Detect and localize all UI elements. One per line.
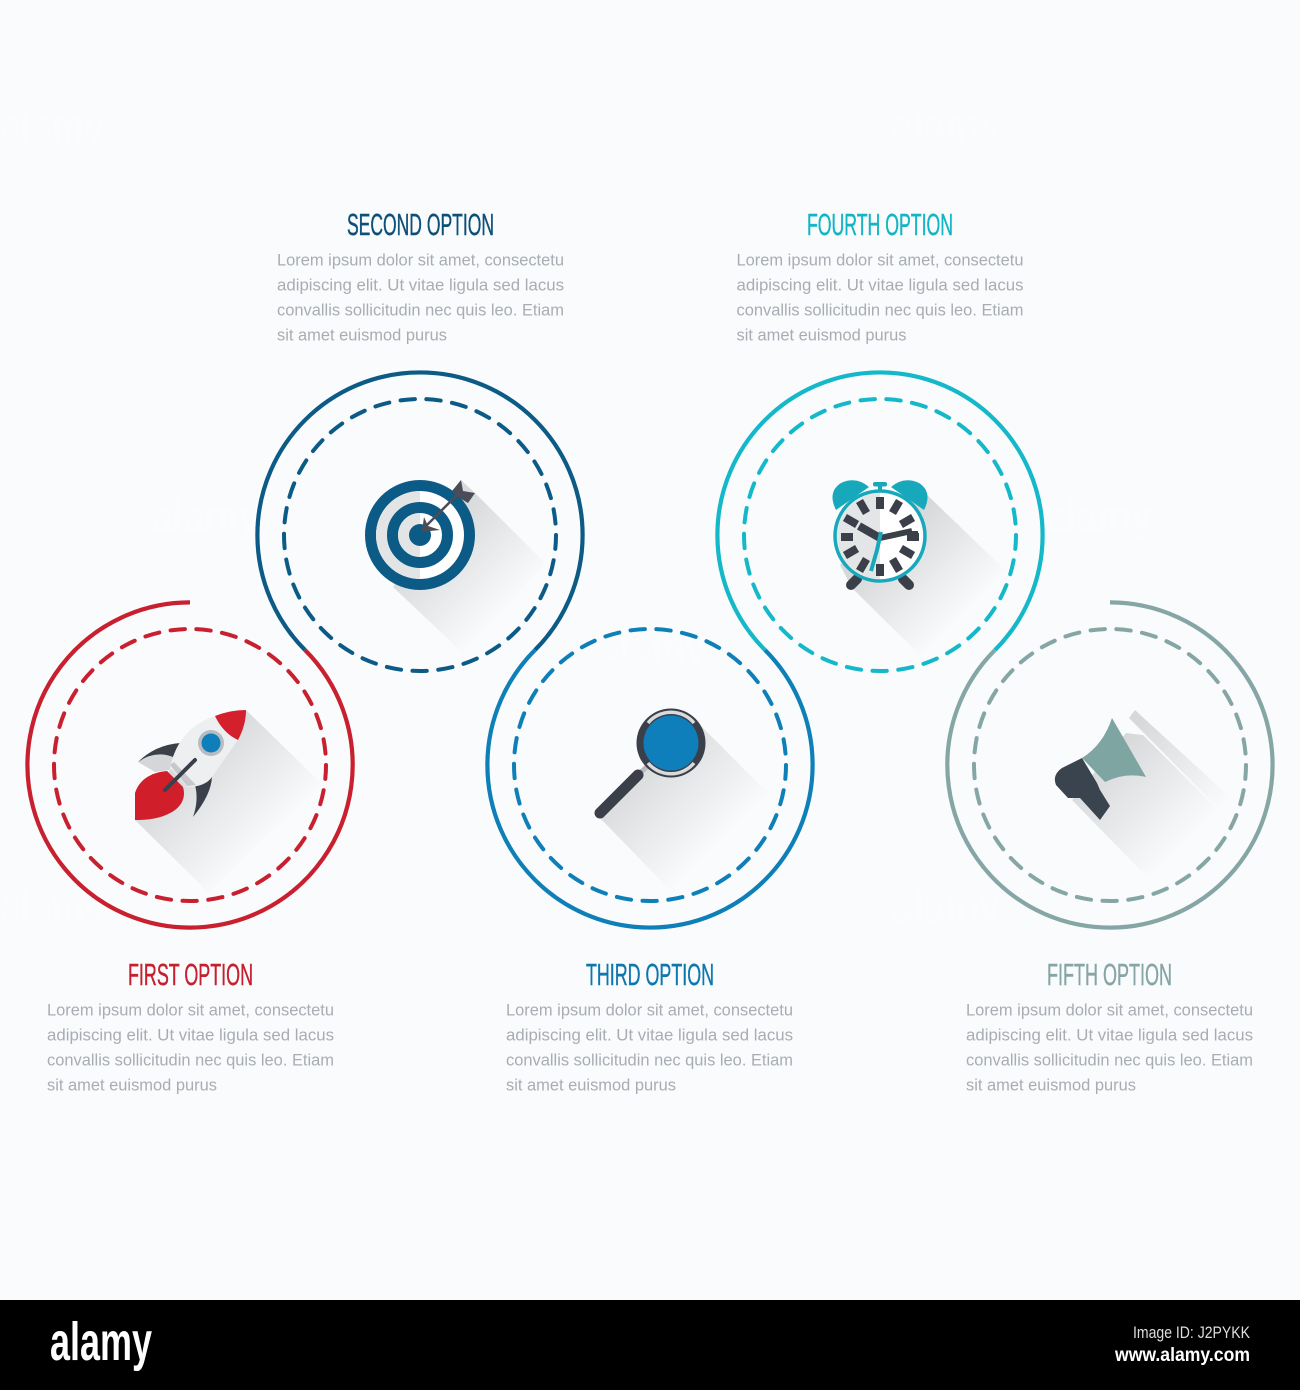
- icon: rocket: [135, 710, 246, 820]
- second option text: convallis sollicitudin nec quis leo. Etiam: [277, 302, 564, 320]
- fourth option text: sit amet euismod purus: [736, 326, 906, 344]
- icon: alarm clock: [832, 480, 928, 585]
- first option heading: FIRST OPTION: [128, 957, 253, 992]
- fourth option outer ring: [717, 372, 1043, 650]
- third option text: Lorem ipsum dolor sit amet, consectetu: [506, 1002, 793, 1020]
- fifth option dashed ring: [974, 629, 1246, 901]
- footer bar: [0, 1300, 1300, 1390]
- icon: target with arrow: [370, 480, 475, 584]
- fourth option text: [736, 252, 1024, 344]
- image id: Image ID: J2PYKK: [1133, 1323, 1251, 1342]
- first option text: [47, 1002, 334, 1094]
- panel: fifth option: [947, 602, 1273, 1094]
- faint watermarks: [0, 100, 1152, 932]
- second option text: adipiscing elit. Ut vitae ligula sed lacus: [277, 276, 564, 294]
- third option text: adipiscing elit. Ut vitae ligula sed lacus: [506, 1026, 793, 1044]
- fifth option text: [966, 1002, 1253, 1094]
- faint watermarks: alamy: [0, 100, 104, 152]
- icon: megaphone: [1055, 718, 1146, 820]
- faint watermarks: alamy: [0, 880, 104, 932]
- second option heading: SECOND OPTION: [347, 207, 494, 242]
- fourth option text: adipiscing elit. Ut vitae ligula sed lacus: [736, 276, 1024, 294]
- fourth option long shadow: [840, 490, 1005, 655]
- third option text: [506, 1002, 793, 1094]
- second option text: sit amet euismod purus: [277, 326, 447, 344]
- faint watermarks: alamy: [152, 490, 260, 542]
- fifth option text: convallis sollicitudin nec quis leo. Etiam: [966, 1052, 1253, 1070]
- second option dashed ring: [284, 399, 556, 671]
- second option outer ring: [257, 372, 583, 650]
- third option text: sit amet euismod purus: [506, 1076, 676, 1094]
- faint watermarks: alamy: [1044, 490, 1152, 542]
- third option dashed ring: [514, 629, 786, 901]
- third option text: convallis sollicitudin nec quis leo. Etiam: [506, 1052, 793, 1070]
- panel: first option: [27, 602, 353, 1094]
- panel: fourth option: [717, 207, 1043, 671]
- first option dashed ring: [54, 629, 326, 901]
- fourth option text: Lorem ipsum dolor sit amet, consectetu: [736, 252, 1024, 270]
- fifth option outer ring: [947, 602, 1273, 928]
- fifth option text: sit amet euismod purus: [966, 1076, 1136, 1094]
- second option long shadow: [393, 480, 545, 655]
- fourth option heading: FOURTH OPTION: [807, 207, 953, 242]
- fourth option dashed ring: [744, 399, 1016, 671]
- faint watermarks: alamy: [892, 880, 1000, 932]
- faint watermarks: alamy: [598, 620, 706, 672]
- first option long shadow: [135, 710, 322, 892]
- third option outer ring: [487, 650, 813, 928]
- icon: magnifying glass: [600, 708, 706, 813]
- fifth option text: adipiscing elit. Ut vitae ligula sed lacus: [966, 1026, 1253, 1044]
- first option text: convallis sollicitudin nec quis leo. Etiam: [47, 1052, 334, 1070]
- second option text: Lorem ipsum dolor sit amet, consectetu: [277, 252, 564, 270]
- second option text: [277, 252, 564, 344]
- first option text: sit amet euismod purus: [47, 1076, 217, 1094]
- faint watermarks: alamy: [892, 100, 1000, 152]
- panel: third option: [487, 629, 813, 1094]
- panel: second option: [257, 207, 583, 671]
- first option outer ring: [27, 602, 353, 928]
- first option text: Lorem ipsum dolor sit amet, consectetu: [47, 1002, 334, 1020]
- third option long shadow: [598, 725, 775, 892]
- fifth option long shadow: [1072, 733, 1225, 883]
- footer logo: alamy: [50, 1312, 152, 1372]
- first option text: adipiscing elit. Ut vitae ligula sed lacus: [47, 1026, 334, 1044]
- fifth option heading: FIFTH OPTION: [1047, 957, 1172, 992]
- third option heading: THIRD OPTION: [586, 957, 714, 992]
- fifth option text: Lorem ipsum dolor sit amet, consectetu: [966, 1002, 1253, 1020]
- website: www.alamy.com: [1114, 1345, 1250, 1366]
- fourth option text: convallis sollicitudin nec quis leo. Etiam: [736, 302, 1024, 320]
